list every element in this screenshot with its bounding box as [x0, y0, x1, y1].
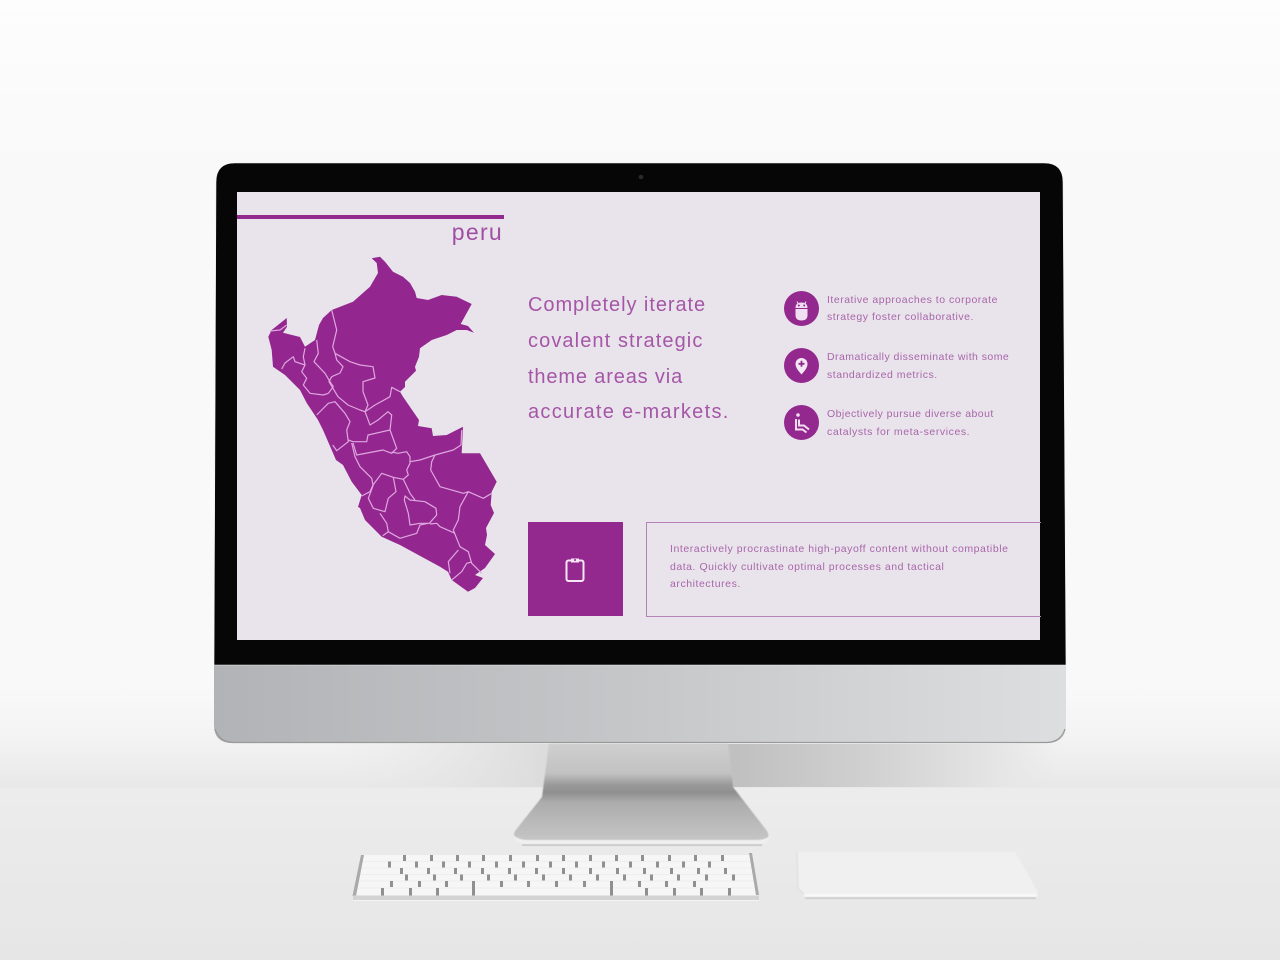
text: iterative approaches	[827, 294, 998, 323]
text: objectively pursue	[827, 408, 994, 438]
callout text: Interactively procrastinate high-payoff content without compatible	[670, 543, 1009, 555]
main statement: accurate e-markets.	[528, 401, 730, 423]
main statement: theme areas via	[528, 366, 683, 388]
map of Peru	[268, 256, 497, 592]
text: dramatically disseminate: standardized metrics.	[827, 368, 938, 380]
text: iterative approaches: Iterative approaches to corporate	[827, 294, 998, 306]
text: objectively pursue: catalysts for meta-services.	[827, 426, 970, 438]
text: iterative approaches: strategy foster collaborative.	[827, 311, 974, 323]
text: objectively pursue: Objectively pursue diverse about	[827, 408, 994, 420]
callout text: data. Quickly cultivate optimal processes and tactical	[670, 560, 944, 572]
clipboard tile	[528, 522, 623, 616]
monitor body	[214, 163, 1066, 744]
icon: clipboard	[566, 558, 584, 582]
text: dramatically disseminate: Dramatically disseminate with some	[827, 351, 1009, 363]
callout text: architectures.	[670, 578, 741, 590]
title bar	[237, 215, 504, 219]
callout box	[646, 522, 1041, 617]
callout text	[670, 543, 1009, 590]
screen: slide	[237, 192, 1040, 640]
icon: seated person	[784, 405, 819, 440]
text: dramatically disseminate	[827, 351, 1009, 380]
main statement: covalent strategic	[528, 330, 703, 352]
icon: android	[784, 291, 819, 326]
heading: peru: peru	[452, 219, 503, 245]
icon: map pin	[784, 348, 819, 383]
main statement: Completely iterate	[528, 294, 706, 316]
main statement	[528, 294, 730, 423]
